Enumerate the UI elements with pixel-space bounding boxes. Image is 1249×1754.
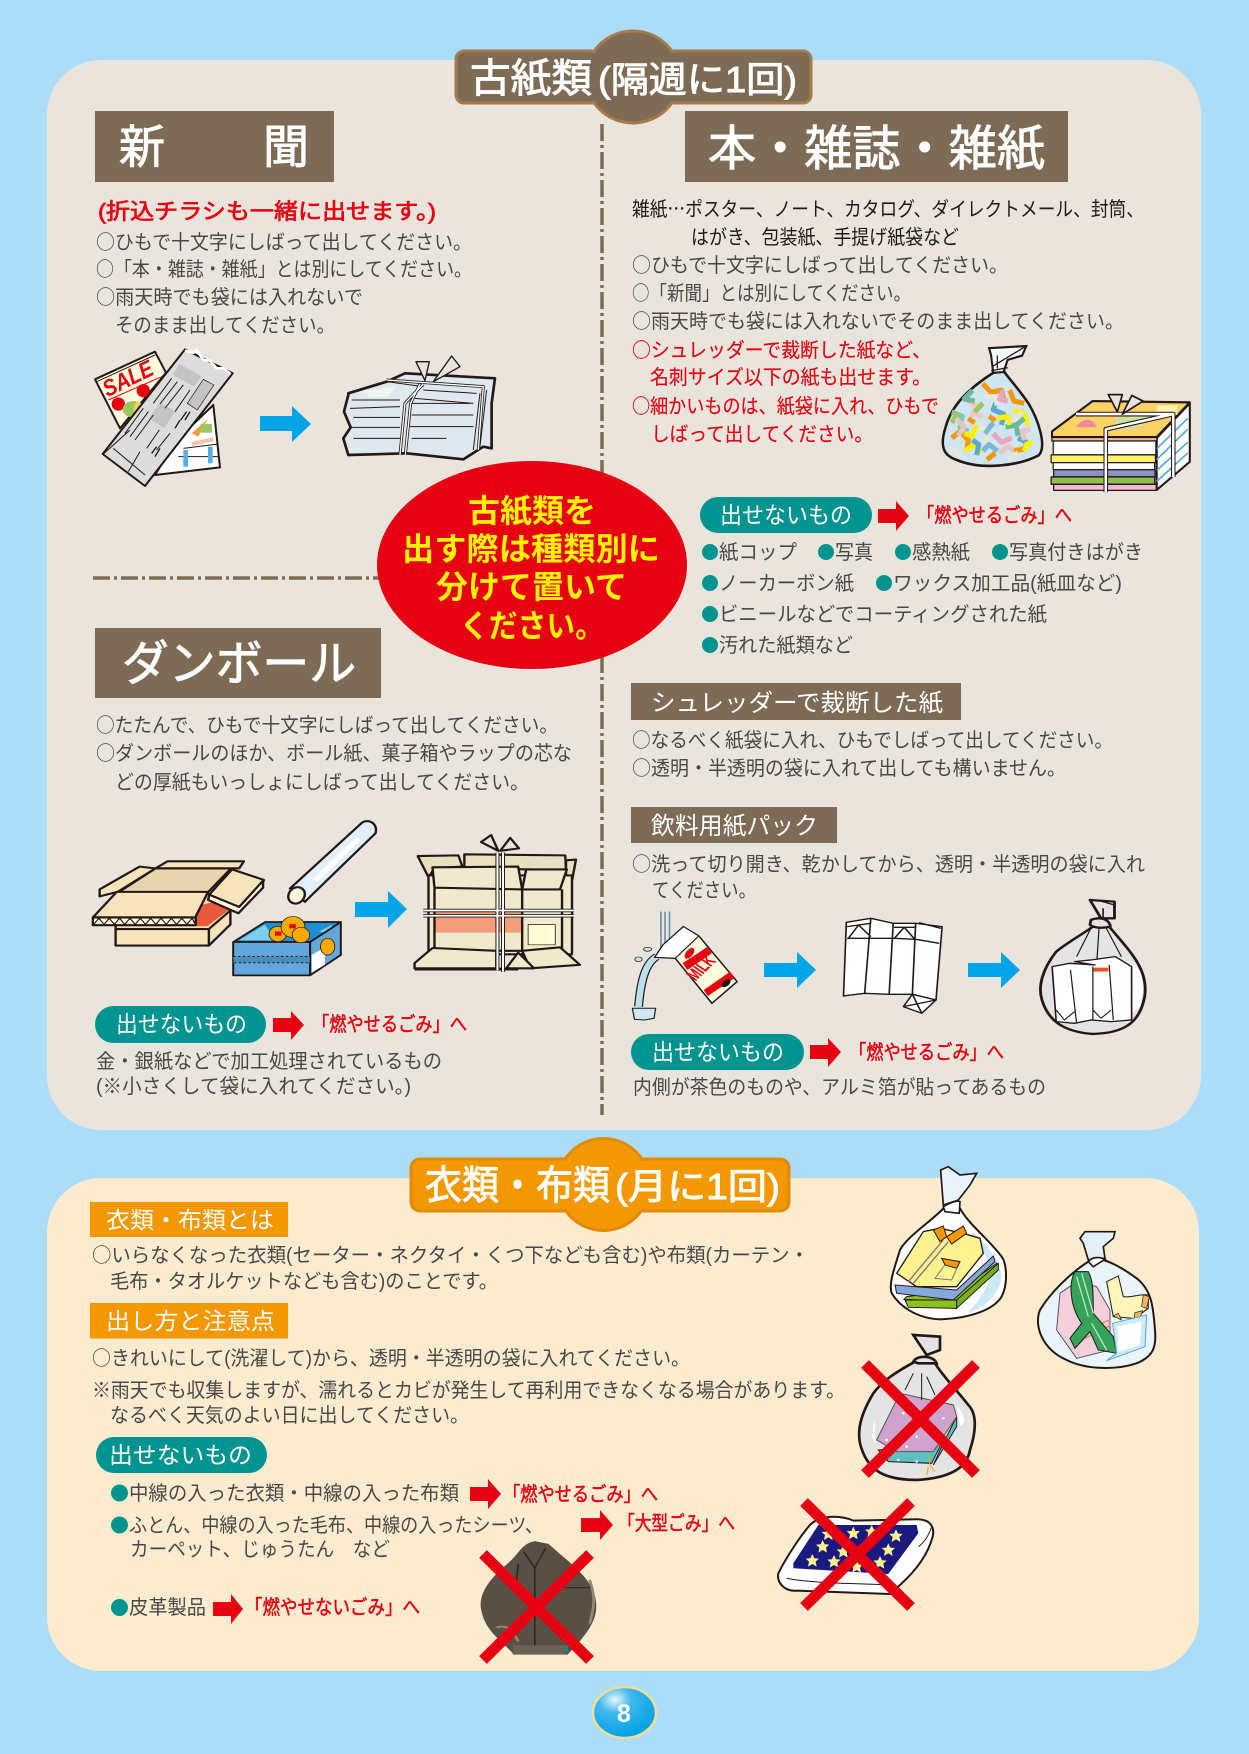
text block: books notes: しばって出してください。 bbox=[651, 423, 873, 446]
title: clothes and fabrics: 衣類・布類 bbox=[425, 1164, 610, 1208]
text block: cardboard exceptions bbox=[96, 1050, 442, 1098]
list: bedding bbox=[111, 1510, 735, 1561]
text block: newspaper notes bbox=[96, 199, 472, 337]
icon: crossed out futon bbox=[778, 1502, 933, 1607]
callout: not accepted, cartons bbox=[631, 1034, 1004, 1070]
text block: drink carton notes bbox=[632, 848, 1145, 902]
text block: cardboard notes: ○たたんで、ひもで十文字にしばって出してください。 bbox=[96, 709, 558, 738]
icon: bag of flattened cartons bbox=[1040, 900, 1145, 1034]
list: not accepted items: ワックス加工品(紙皿など) bbox=[893, 572, 1122, 595]
text block: shredded paper notes: ○透明・半透明の袋に入れて出しても構いません。 bbox=[632, 752, 1066, 781]
icon: tied newspaper bundle bbox=[343, 356, 495, 459]
callout: red ellipse: 古紙類を bbox=[468, 493, 596, 529]
title: clothes and fabrics bbox=[411, 1138, 789, 1230]
text block: how to put out: なるべく天気のよい日に出してください。 bbox=[110, 1404, 469, 1427]
callout: not accepted, cardboard: 出せないもの bbox=[116, 1011, 247, 1037]
list: padded clothes: 「燃やせるごみ」へ bbox=[503, 1483, 658, 1506]
icon: milk carton being rinsed bbox=[632, 912, 737, 1020]
text block: newspaper notes: ○「本・雑誌・雑紙」とは別にしてください。 bbox=[96, 253, 472, 282]
heading: books and magazines: 本・雑誌・雑紙 bbox=[708, 123, 1045, 176]
icon: crossed out bag of padded futon bbox=[859, 1335, 976, 1480]
pill: not accepted bbox=[96, 1437, 267, 1473]
text block: how to put out bbox=[92, 1342, 845, 1427]
list: not accepted items: 紙コップ bbox=[719, 541, 797, 564]
heading: how to put out bbox=[90, 1303, 288, 1338]
heading: cardboard: ダンボール bbox=[122, 638, 356, 691]
text block: cardboard notes: どの厚紙もいっしょにしばって出してください。 bbox=[115, 771, 529, 794]
icon: milk carton being rinsed: MILK bbox=[682, 952, 720, 984]
callout: not accepted, cardboard bbox=[95, 1006, 467, 1043]
heading: drink cartons: 飲料用紙パック bbox=[651, 813, 818, 840]
text block: newspaper notes: (折込チラシも一緒に出せます。) bbox=[98, 199, 436, 224]
callout: red ellipse: 出す際は種類別に bbox=[402, 531, 660, 567]
callout: not accepted, cardboard: 「燃やせるごみ」へ bbox=[312, 1013, 467, 1036]
icon: bag of ties and socks bbox=[1038, 1232, 1155, 1368]
section: shredded paper bbox=[631, 683, 1113, 781]
list: not accepted items: ビニールなどでコーティングされた紙 bbox=[719, 603, 1047, 626]
text block: books notes: 名刺サイズ以下の紙も出せます。 bbox=[650, 366, 931, 389]
callout: not accepted, books: 「燃やせるごみ」へ bbox=[917, 504, 1072, 527]
heading: shredded paper: シュレッダーで裁断した紙 bbox=[651, 690, 943, 717]
callout: not accepted, books bbox=[700, 497, 1072, 533]
heading: newspaper bbox=[95, 111, 334, 182]
list: bedding: ふとん、中線の入った毛布、中線の入ったシーツ、 bbox=[129, 1514, 543, 1537]
icon: tied stack of magazines bbox=[1051, 395, 1190, 492]
list: not accepted items: 感熱紙 bbox=[912, 541, 970, 564]
divider: horizontal dashed bbox=[93, 576, 390, 580]
title: waste paper: 古紙類 bbox=[470, 57, 592, 101]
text block: books notes bbox=[632, 193, 1144, 446]
pill: not accepted: 出せないもの bbox=[109, 1442, 252, 1468]
text block: books notes: ○細かいものは、紙袋に入れ、ひもで bbox=[632, 390, 939, 419]
list: leather: 「燃やせないごみ」へ bbox=[245, 1596, 420, 1619]
section: drink cartons bbox=[631, 807, 1145, 1099]
icon: open cardboard box bbox=[93, 861, 264, 946]
icon: wrap roll core bbox=[285, 821, 376, 906]
callout: not accepted, cartons: 出せないもの bbox=[652, 1039, 784, 1065]
list: bedding: カーペット、じゅうたん など bbox=[130, 1538, 390, 1561]
icon: newspaper and flyers bbox=[95, 349, 233, 486]
text block: books notes: ○ひもで十文字にしばって出してください。 bbox=[632, 249, 1008, 278]
list: padded clothes bbox=[111, 1479, 658, 1509]
text block: cardboard exceptions: 金・銀紙などで加工処理されているもの bbox=[96, 1050, 442, 1073]
list: not accepted items: ノーカーボン紙 bbox=[719, 572, 854, 595]
text block: books notes: ○「新聞」とは別にしてください。 bbox=[632, 277, 911, 306]
heading: newspaper: 新 bbox=[119, 121, 165, 173]
text block: newspaper notes: ○ひもで十文字にしばって出してください。 bbox=[96, 226, 472, 255]
title: waste paper: (隔週に1回) bbox=[598, 59, 797, 100]
text block: books notes: 雑紙…ポスター、ノート、カタログ、ダイレクトメール、封筒、 bbox=[632, 193, 1144, 222]
title: clothes and fabrics: (月に1回) bbox=[615, 1166, 780, 1207]
callout: red ellipse: 分けて置いて bbox=[436, 569, 627, 605]
heading: what are clothes bbox=[90, 1202, 288, 1237]
list: leather: 皮革製品 bbox=[129, 1596, 206, 1619]
list: leather bbox=[111, 1594, 420, 1624]
list: not accepted items: 写真付きはがき bbox=[1009, 541, 1143, 564]
icon: bag of shredded paper bbox=[943, 346, 1042, 466]
icon: candy box bbox=[233, 916, 341, 975]
text block: clothes definition bbox=[92, 1239, 809, 1293]
text block: cardboard exceptions: (※小さくして袋に入れてください。) bbox=[96, 1075, 411, 1098]
text block: books notes: ○シュレッダーで裁断した紙など、 bbox=[632, 334, 931, 363]
text block: clothes definition: ○いらなくなった衣類(セーター・ネクタイ・くつ下なども含む)や布類(カーテン・ bbox=[92, 1239, 809, 1268]
heading: what are clothes: 衣類・布類とは bbox=[106, 1207, 274, 1233]
title: waste paper bbox=[456, 31, 811, 123]
callout: red ellipse: ください。 bbox=[460, 608, 604, 644]
list: not accepted items bbox=[702, 541, 1143, 657]
list: padded clothes: 中線の入った衣類・中線の入った布類 bbox=[129, 1482, 459, 1505]
panel: clothes and fabrics bbox=[47, 1138, 1199, 1671]
text block: shredded paper notes: ○なるべく紙袋に入れ、ひもでしばって出してください。 bbox=[632, 724, 1113, 753]
text block: drink carton notes: てください。 bbox=[652, 880, 756, 902]
callout: not accepted, cartons: 「燃やせるごみ」へ bbox=[849, 1041, 1004, 1064]
icon: crossed out leather jacket bbox=[481, 1541, 596, 1660]
heading: books and magazines bbox=[685, 111, 1068, 182]
page number badge: 8 bbox=[617, 1700, 631, 1728]
text block: newspaper notes: そのまま出してください。 bbox=[115, 314, 335, 337]
list: bedding: 「大型ごみ」へ bbox=[618, 1512, 735, 1535]
section: cardboard bbox=[93, 628, 580, 1098]
text block: carton exceptions: 内側が茶色のものや、アルミ箔が貼ってあるもの bbox=[633, 1076, 1046, 1099]
callout: red ellipse bbox=[377, 461, 687, 669]
icon: newspaper and flyers: SALE bbox=[98, 355, 159, 402]
callout: not accepted, books: 出せないもの bbox=[720, 502, 852, 528]
text block: cardboard notes bbox=[96, 709, 572, 794]
heading: shredded paper bbox=[631, 683, 961, 720]
icon: opened flat carton bbox=[843, 918, 942, 1013]
text block: newspaper notes: ○雨天時でも袋には入れないで bbox=[96, 281, 363, 310]
text block: cardboard notes: ○ダンボールのほか、ボール紙、菓子箱やラップの芯な bbox=[96, 737, 572, 766]
text block: shredded paper notes bbox=[632, 724, 1113, 781]
arrow: cardboard bbox=[355, 891, 407, 928]
section: books and magazines bbox=[632, 111, 1190, 657]
text block: books notes: はがき、包装紙、手提げ紙袋など bbox=[691, 226, 959, 249]
text block: drink carton notes: ○洗って切り開き、乾かしてから、透明・半透明の袋に入れ bbox=[632, 848, 1145, 877]
heading: newspaper: 聞 bbox=[263, 121, 309, 173]
section: newspaper bbox=[95, 111, 495, 486]
list: not accepted items: 写真 bbox=[835, 541, 873, 564]
text block: how to put out: ※雨天でも収集しますが、濡れるとカビが発生して再利用できなくなる場合があります。 bbox=[92, 1379, 845, 1402]
heading: drink cartons bbox=[631, 807, 837, 843]
text block: how to put out: ○きれいにして(洗濯して)から、透明・半透明の袋に入れてください。 bbox=[92, 1342, 690, 1371]
list: not accepted items: 汚れた紙類など bbox=[719, 634, 853, 657]
icon: bag of shirts bbox=[891, 1167, 1006, 1319]
arrow: flat to bag bbox=[968, 952, 1020, 988]
text block: books notes: ○雨天時でも袋には入れないでそのまま出してください。 bbox=[632, 305, 1124, 334]
divider: vertical dashed bbox=[600, 124, 604, 1115]
arrow: carton to flat bbox=[764, 952, 816, 988]
page number badge bbox=[593, 1687, 656, 1738]
heading: cardboard bbox=[95, 628, 381, 698]
heading: how to put out: 出し方と注意点 bbox=[106, 1308, 275, 1334]
panel: waste paper bbox=[47, 31, 1201, 1130]
icon: tied cardboard bundle bbox=[415, 835, 580, 972]
arrow: newspaper bbox=[260, 406, 311, 442]
text block: clothes definition: 毛布・タオルケットなども含む)のことです。 bbox=[110, 1270, 498, 1293]
